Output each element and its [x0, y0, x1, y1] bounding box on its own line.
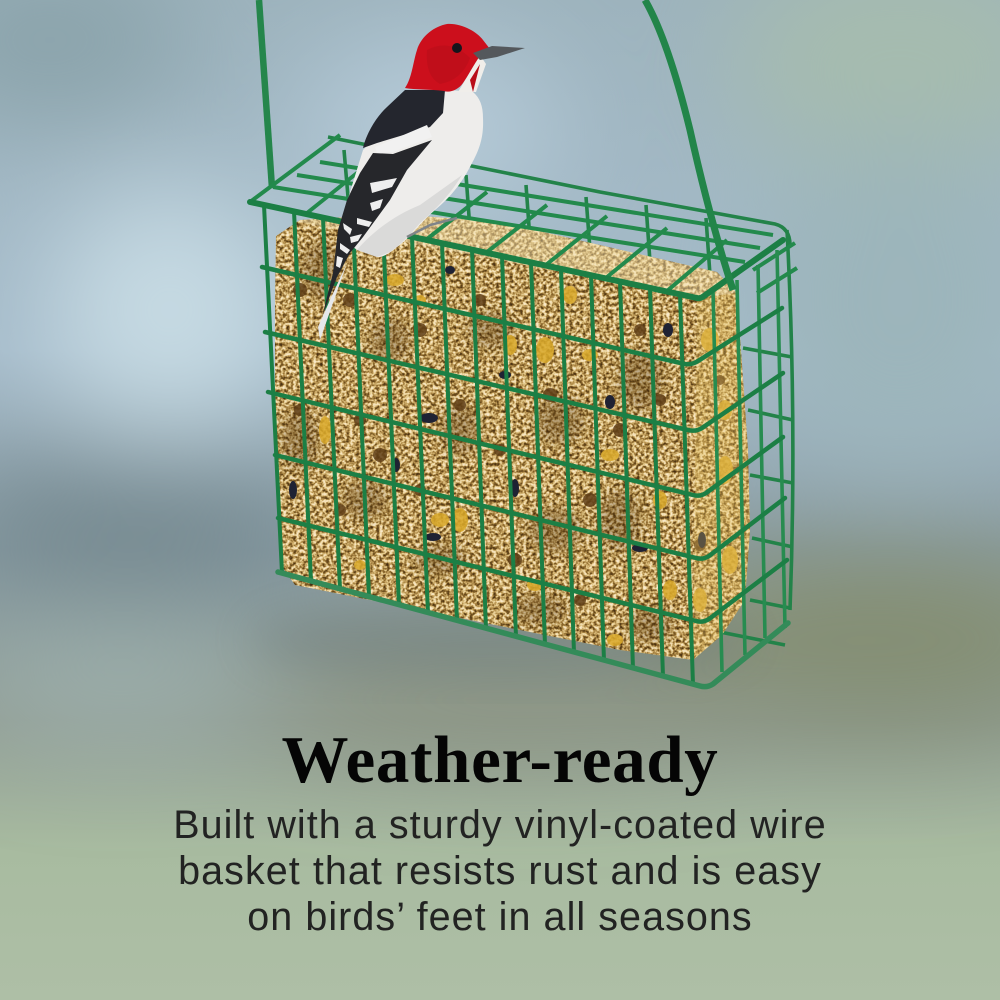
body text	[173, 803, 827, 939]
bird: red-headed woodpecker	[318, 24, 525, 340]
hanging wire: right	[645, 0, 733, 290]
body text: on birds’ feet in all seasons	[247, 895, 753, 939]
bird eye	[452, 43, 462, 53]
suet seed cake	[270, 210, 760, 670]
bird wing spots	[336, 178, 397, 268]
basket: top wires	[250, 135, 797, 293]
bird white body	[338, 90, 483, 257]
bird cheek	[427, 46, 470, 84]
feeder basket with suet cake	[250, 135, 797, 687]
basket: front vertical wires	[264, 205, 693, 685]
bird tail feather	[318, 263, 347, 340]
basket: side verticals	[713, 250, 785, 672]
suet right side	[693, 293, 750, 660]
bird white wing bar	[375, 125, 432, 153]
bird throat	[470, 64, 480, 92]
bird red head	[405, 24, 490, 92]
basket: front horizontal wires	[250, 202, 788, 687]
body shading	[357, 175, 462, 257]
hanging wire: left	[259, 0, 272, 188]
bird beak	[473, 46, 525, 60]
basket: rear wires	[328, 137, 793, 645]
suet top surface	[300, 214, 737, 298]
shadow below feeder	[250, 600, 750, 680]
title: Weather-ready	[281, 723, 719, 797]
body text: Built with a sturdy vinyl-coated wire	[173, 803, 827, 847]
body text: basket that resists rust and is easy	[178, 849, 822, 893]
bird feet	[407, 218, 457, 237]
bird collar	[458, 55, 486, 92]
bird upper wing	[363, 90, 445, 148]
bird lower wing	[322, 140, 432, 317]
